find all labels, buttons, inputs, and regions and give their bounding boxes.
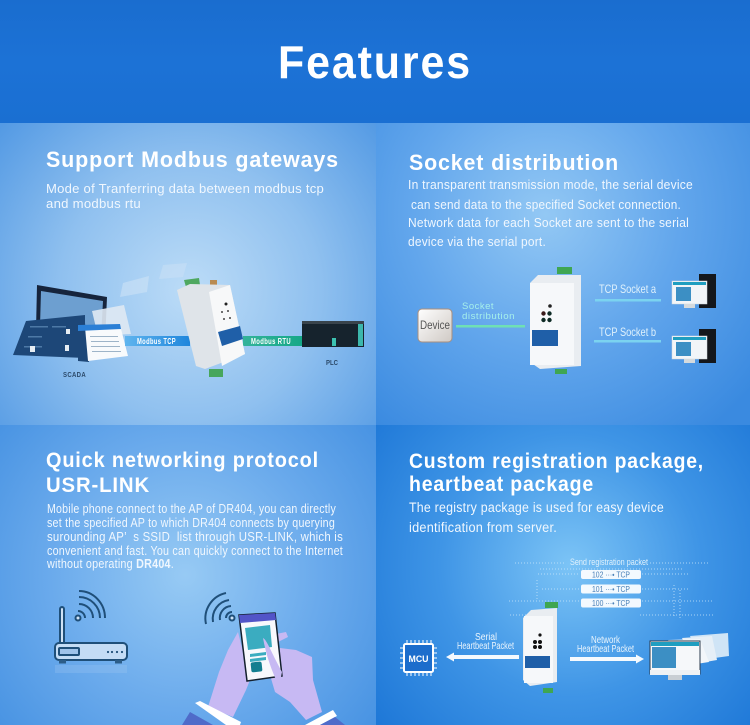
Socket distribution link: distribution	[462, 311, 515, 322]
panel: Modbus gateways	[0, 123, 376, 425]
heading: Custom registration package, heartbeat package	[409, 449, 704, 496]
icon: hands holding phone with wifi	[182, 593, 345, 725]
computer a	[672, 274, 716, 308]
TCP Socket b: TCP Socket b	[599, 325, 656, 339]
description: can send data to the specified Socket connection.	[411, 197, 681, 212]
registration packet diagram	[509, 557, 714, 618]
description: without operating DR404.	[46, 557, 174, 571]
description: In transparent transmission mode, the serial device	[408, 177, 693, 192]
panel: Socket distribution	[376, 123, 750, 425]
description: Mobile phone connect to the AP of DR404, you can directly	[47, 502, 336, 516]
description	[409, 500, 664, 535]
Send registration packet label: Send registration packet	[570, 557, 648, 568]
panel: Quick networking protocol	[0, 425, 376, 725]
header band	[0, 0, 750, 123]
Network Heartbeat Packet arrow	[570, 635, 644, 664]
Modbus TCP link: Modbus TCP	[137, 337, 176, 346]
description: The registry package is used for easy device	[409, 500, 664, 515]
title: Features	[278, 36, 472, 88]
computer b	[672, 329, 716, 363]
heading: Socket distribution: Socket distribution	[409, 150, 619, 175]
description	[46, 502, 343, 571]
SCADA label: SCADA	[63, 370, 86, 379]
Device button: Device	[420, 318, 450, 332]
Serial Heartbeat Packet arrow: Heartbeat Packet	[457, 641, 514, 652]
PLC unit	[302, 321, 364, 367]
Serial Heartbeat Packet arrow	[446, 632, 519, 662]
SCADA screens illustration	[13, 263, 187, 379]
icon: router with wifi	[55, 591, 127, 673]
icon: MCU chip	[400, 640, 437, 676]
description: and modbus rtu	[46, 196, 141, 211]
heading: Support Modbus gateways: Support Modbus gateways	[46, 147, 339, 172]
Socket distribution link: Socket	[462, 301, 494, 312]
DR404 device, front	[530, 267, 581, 374]
DR404 device, angled	[177, 278, 245, 377]
heading: Quick networking protocol USR-LINK: USR-LINK	[46, 473, 150, 497]
heading: Custom registration package, heartbeat package: Custom registration package,	[409, 449, 704, 473]
description: surounding AP’ s SSID list through USR-LINK, which is	[47, 530, 343, 544]
TCP Socket a: TCP Socket a	[599, 282, 656, 296]
heading: Quick networking protocol USR-LINK	[46, 448, 319, 497]
panel: Custom registration package	[376, 425, 750, 725]
heading: Custom registration package, heartbeat package: heartbeat package	[409, 472, 594, 496]
icon: MCU chip: MCU	[408, 654, 428, 664]
packet pill 102: 102 ···• TCP	[592, 570, 630, 580]
description	[46, 181, 324, 211]
description: Mode of Tranferring data between modbus tcp	[46, 181, 324, 196]
TCP Socket a	[595, 282, 661, 302]
packet pill 101: 101 ···• TCP	[592, 585, 630, 594]
DR404 device	[523, 602, 558, 693]
Device button	[418, 309, 452, 342]
Modbus RTU link: Modbus RTU	[251, 337, 291, 346]
description: set the specified AP to which DR404 connects by querying	[47, 516, 335, 530]
Serial Heartbeat Packet arrow: Serial	[475, 632, 497, 643]
description: convenient and fast. You can quickly connect to the Internet	[47, 544, 343, 558]
description: device via the serial port.	[408, 234, 546, 249]
Network Heartbeat Packet arrow: Heartbeat Packet	[577, 644, 634, 655]
monitor with report pages	[650, 633, 729, 680]
PLC label: PLC	[326, 358, 338, 367]
packet pill 100: 100 ···• TCP	[592, 599, 630, 608]
Socket distribution link	[456, 301, 525, 328]
heading: Quick networking protocol USR-LINK: Quick networking protocol	[46, 448, 319, 472]
description: Network data for each Socket are sent to the serial	[408, 215, 689, 230]
TCP Socket b	[594, 325, 661, 342]
description: identification from server.	[409, 520, 557, 535]
description	[408, 177, 693, 249]
Network Heartbeat Packet arrow: Network	[591, 635, 621, 646]
